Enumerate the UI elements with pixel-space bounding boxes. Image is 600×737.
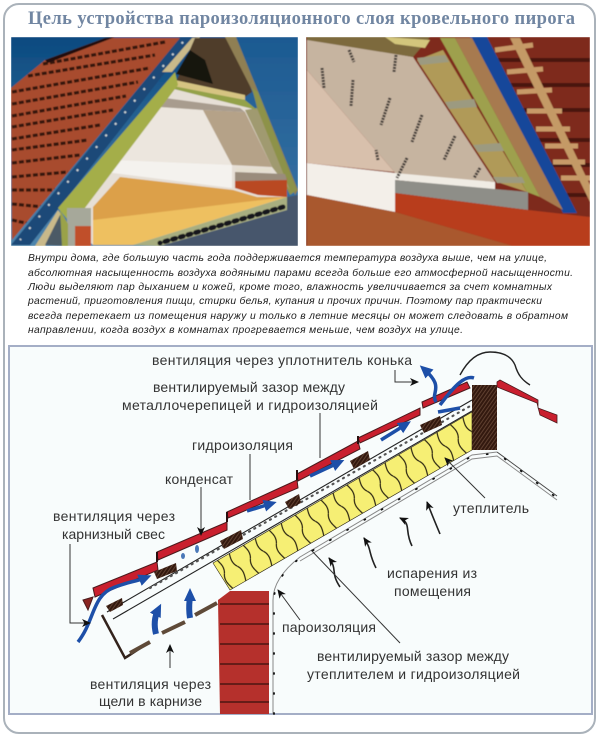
text block: растений, приготовления пищи, стирки белья, купания и прочих причин. Поэтому пар практически xyxy=(27,295,542,307)
insulation xyxy=(417,50,527,192)
diagram labels: щели в карнизе xyxy=(99,693,202,709)
red lower xyxy=(395,193,590,246)
diagram labels: помещения xyxy=(394,583,471,599)
wood floor xyxy=(307,195,513,246)
diagram: blue airflow arrows xyxy=(78,370,474,642)
diagram labels: вентиляция через xyxy=(53,508,175,524)
green strip xyxy=(440,38,540,197)
diagram: leader lines xyxy=(70,370,485,668)
red lower wall xyxy=(235,178,287,197)
diagram: red metal tiles xyxy=(83,382,470,610)
text block: абсолютная насыщенность воздуха водяными парами всегда больше его атмосферной насыщенности. xyxy=(28,267,573,279)
diagram labels: вентиляция через уплотнитель конька xyxy=(152,352,412,368)
diagram labels: испарения из xyxy=(387,565,477,581)
white band xyxy=(307,163,395,212)
white wall xyxy=(124,108,162,158)
text block: Внутри дома, где большую часть года поддерживается температура воздуха выше, чем на улице, xyxy=(28,252,547,264)
diagram labels: металлочерепицей и гидроизоляцией xyxy=(122,397,378,413)
floor xyxy=(92,176,286,221)
top beams xyxy=(307,37,430,57)
text block: направлении, когда воздух в комнатах прогревается меньше, чем воздух на улице. xyxy=(28,325,463,336)
beige strip xyxy=(162,37,200,72)
tan membrane xyxy=(203,110,272,167)
right rafter xyxy=(225,37,298,195)
diagram labels: утеплитель xyxy=(453,500,529,516)
panel: roof diagram xyxy=(9,346,592,714)
diagram labels: гидроизоляция xyxy=(192,437,293,453)
diagram: ridge brick xyxy=(472,385,497,450)
diagram: vapour barrier layer xyxy=(273,452,557,714)
roof tiles xyxy=(11,37,186,242)
diagram labels: конденсат xyxy=(165,471,234,487)
membrane print xyxy=(322,50,480,178)
slab xyxy=(133,197,287,246)
red wood planks xyxy=(495,60,590,195)
interior backdrop xyxy=(72,88,287,245)
horizontal laths xyxy=(495,45,590,178)
attic dark xyxy=(176,38,252,97)
text block xyxy=(27,252,573,336)
diagram: condensate drops xyxy=(181,545,199,559)
diagram labels: вентилируемый зазор между xyxy=(317,648,509,664)
diagram: evaporation arrows xyxy=(329,502,440,587)
diagram: yellow insulation xyxy=(213,412,472,590)
blue membrane xyxy=(470,37,577,213)
title: Цель устройства пароизоляционного слоя кровельного пирога xyxy=(28,9,575,29)
grey band xyxy=(395,180,528,210)
pink wall xyxy=(307,70,397,175)
diagram labels: пароизоляция xyxy=(282,619,376,635)
diagram: hydro-insulation layer xyxy=(107,400,472,619)
diagram labels: карнизный свес xyxy=(62,526,165,542)
blue batten strip xyxy=(11,38,192,245)
green insulation band xyxy=(58,72,178,225)
diagram: soffit box xyxy=(102,603,217,658)
diagram: far-side ridge tile xyxy=(497,380,557,423)
diagram: ridge cap seal xyxy=(460,352,530,385)
diagram: roof battens xyxy=(106,416,442,612)
photo: attic cross-section with tiled roof xyxy=(11,37,298,246)
ceiling beams xyxy=(173,80,245,100)
photo: interior with vapour barrier membrane xyxy=(306,37,590,246)
diagonal rafter xyxy=(510,38,590,202)
text block: всегда перетекает из помещения наружу и только в летние месяцы он может следовать в обратном xyxy=(28,310,568,322)
wall column xyxy=(67,208,91,246)
text block: Люди выделяют пар дыханием и кожей, кроме того, влажность увеличивается за счет комнатных xyxy=(27,282,553,293)
ridge shadow xyxy=(45,37,115,63)
diagram labels xyxy=(53,352,529,709)
diagram labels: утеплителем и гидроизоляцией xyxy=(307,666,520,682)
tan membrane xyxy=(307,38,495,182)
diagram labels: вентилируемый зазор между xyxy=(153,379,345,395)
diagram: brick wall xyxy=(218,591,269,714)
brown batten xyxy=(455,38,563,210)
diagram labels: вентиляция через xyxy=(90,676,211,692)
